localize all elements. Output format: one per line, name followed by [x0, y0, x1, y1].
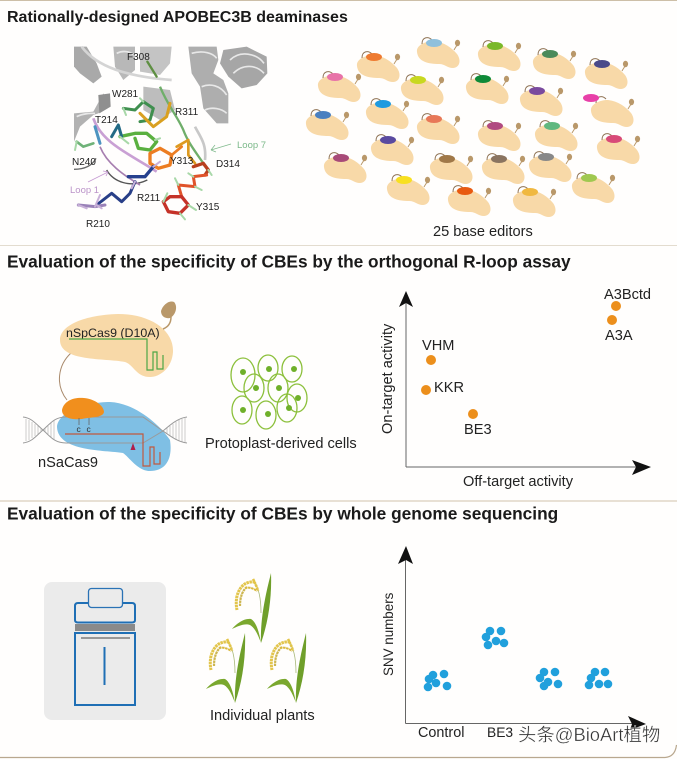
caption: Protoplast-derived cells: Protoplast-derived cells — [205, 436, 357, 452]
red guide RNA — [65, 434, 160, 466]
heading: Rationally-designed APOBEC3B deaminases: Rationally-designed APOBEC3B deaminases — [7, 9, 348, 26]
Control points — [424, 670, 451, 691]
panel: protein structure — [70, 47, 267, 230]
panel: 25 base editors — [306, 38, 640, 217]
category labels: BE3 — [487, 725, 513, 740]
label: Loop 1: Loop 1 — [70, 185, 99, 196]
axes — [406, 555, 640, 724]
residue labels: D314 — [216, 159, 240, 170]
residue labels: R211 — [137, 193, 161, 204]
y axis label: On-target activity — [380, 323, 396, 434]
BE3 points — [482, 627, 508, 649]
cytosine bases: c — [86, 424, 92, 434]
diagram: orthogonal R-loop assay — [23, 301, 187, 471]
point labels: KKR — [434, 380, 464, 396]
cytosine bases — [76, 418, 92, 434]
label: nSpCas9 (D10A): nSpCas9 (D10A) — [66, 326, 160, 340]
icon: sequencer — [44, 582, 166, 720]
category labels: Control — [418, 725, 464, 741]
orange deaminase — [62, 398, 104, 419]
sticks — [75, 62, 212, 219]
helix highlights — [77, 52, 264, 117]
point labels: A3A — [605, 328, 633, 344]
nick marker — [130, 443, 136, 450]
nSaCas9 body — [57, 402, 171, 471]
scatter chart: SNV numbers — [381, 546, 646, 741]
cells: protoplast-derived — [231, 355, 307, 429]
residue labels: N240 — [72, 157, 96, 168]
caption: 25 base editors: 25 base editors — [433, 224, 533, 240]
fourth group points — [585, 668, 612, 689]
caption: Individual plants: Individual plants — [210, 708, 315, 724]
green guide RNA — [69, 339, 163, 370]
loop ribbons — [93, 118, 157, 172]
y axis label: SNV numbers — [381, 592, 396, 676]
residue labels: R311 — [175, 107, 199, 118]
axes — [406, 300, 640, 467]
nSpCas9 body — [60, 314, 173, 377]
residue labels: W281 — [112, 89, 139, 100]
watermark: 头条@BioArt植物 — [518, 724, 660, 745]
residue labels: T214 — [95, 115, 118, 126]
DNA helices — [23, 417, 187, 443]
label: nSaCas9: nSaCas9 — [38, 455, 98, 471]
heading: whole genome sequencing: Evaluation of the specificity of CBEs by whole genome sequencing — [7, 504, 558, 524]
label: Loop 7 — [211, 140, 266, 152]
residue labels: R210 — [86, 219, 110, 230]
cytosine bases: c — [76, 424, 82, 434]
scatter chart: on-target vs off-target — [380, 287, 651, 490]
point labels: BE3 — [464, 422, 492, 438]
residue labels: Y313 — [170, 156, 194, 167]
points — [421, 301, 621, 419]
residue labels: F308 — [127, 52, 150, 63]
third group points — [536, 668, 562, 690]
label: Loop 1 — [70, 171, 108, 196]
category labels — [418, 725, 513, 741]
heading: orthogonal R-loop assay: Evaluation of the specificity of CBEs by the orthogonal R-loop assay — [7, 252, 571, 272]
residue labels — [72, 52, 240, 230]
residue labels: Y315 — [196, 202, 220, 213]
x axis label: Off-target activity — [463, 474, 574, 490]
icon: rice plants — [206, 573, 306, 703]
linker — [59, 353, 71, 400]
point labels: A3Bctd — [604, 287, 651, 303]
point labels — [422, 287, 651, 438]
tail knob — [161, 301, 176, 329]
point labels: VHM — [422, 338, 454, 354]
label: Loop 7: Loop 7 — [237, 140, 266, 151]
gray ribbons — [74, 47, 267, 142]
hydrogen tips — [75, 98, 212, 219]
